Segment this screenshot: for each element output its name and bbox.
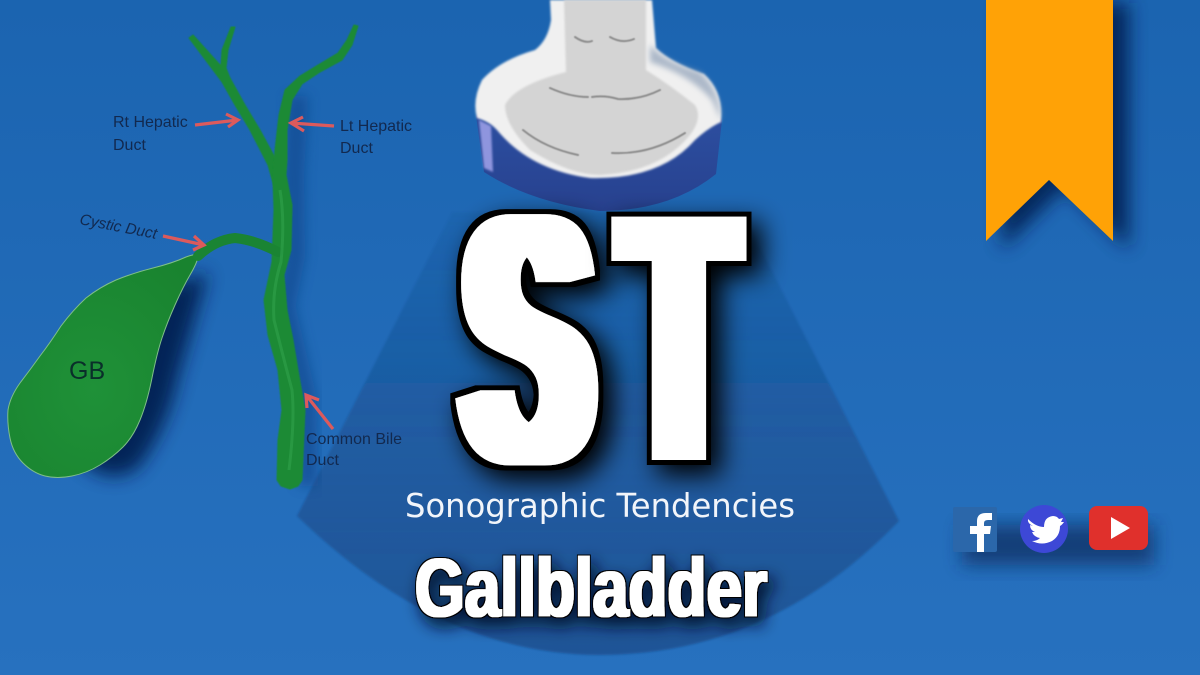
icon: twitter [1020,505,1068,553]
label: Common Bile Duct [306,431,402,469]
label: Rt Hepatic Duct: Rt Hepatic [113,114,188,131]
social shadow [962,525,1154,565]
left hepatic and common bile duct [264,25,358,489]
transducer ridges [523,37,685,155]
label: Common Bile Duct: Duct [306,452,339,469]
right hepatic duct branches [189,27,282,190]
arrow: Common Bile [306,395,333,429]
transducer right-side shade [650,45,721,120]
ultrasound sector beam [297,212,899,655]
transducer blue cup [476,70,722,211]
arrows [163,114,334,429]
cystic duct [198,238,278,256]
icon: youtube [1089,506,1148,550]
letter T: T [623,145,734,531]
arrow: Cystic [163,236,204,250]
ultrasound transducer [475,0,722,211]
ducts [189,25,358,489]
heading: Gallbladder: Gallbladder [415,541,767,634]
letter S: S [467,141,588,537]
social icons [953,505,1154,565]
arrow: Rt Hepatic [195,114,238,127]
transducer white body [475,0,721,178]
subtitle: Sonographic Tendencies [405,486,795,525]
label: Rt Hepatic Duct [113,114,188,154]
duct shadow [285,96,308,486]
arrow: Lt Hepatic [291,117,334,131]
bookmark ribbon shadow [1002,3,1129,249]
label: Lt Hepatic Duct: Lt Hepatic [340,118,412,135]
label: Cystic Duct: Cystic Duct [78,211,159,243]
anatomy shadow [78,273,208,476]
duct highlight [274,190,293,470]
icon: facebook [953,507,997,552]
transducer grey face [505,0,698,175]
label: Lt Hepatic Duct [340,118,412,157]
label: Lt Hepatic Duct: Duct [340,140,373,157]
gallbladder anatomy diagram [8,25,412,489]
label: GB: GB [69,357,105,385]
transducer side highlight [479,120,493,172]
gallbladder body [8,254,198,478]
label: Rt Hepatic Duct: Duct [113,137,146,154]
label: Common Bile Duct: Common Bile [306,431,402,448]
logo ST [467,141,734,537]
bookmark ribbon [986,0,1113,241]
